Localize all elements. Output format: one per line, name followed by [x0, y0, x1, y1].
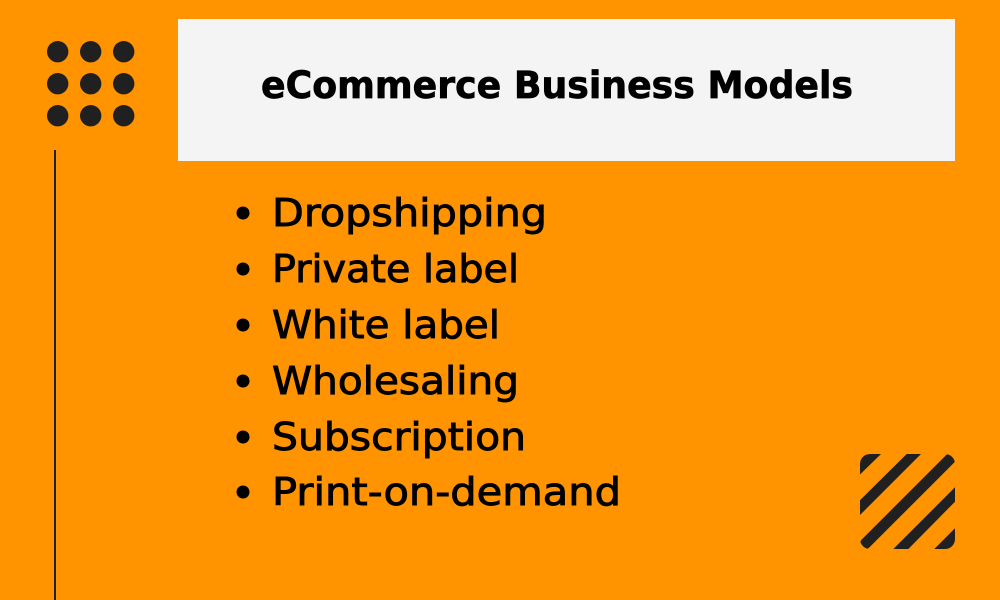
- item: Private label: Private label: [272, 247, 519, 292]
- item: Print-on-demand: Print-on-demand: [272, 470, 621, 515]
- item: White label: White label: [272, 303, 500, 348]
- item: Wholesaling: Wholesaling: [272, 359, 519, 404]
- bullet list: [236, 191, 621, 515]
- icon: striped square: [860, 454, 955, 549]
- title panel: [178, 19, 955, 161]
- item: Dropshipping: Dropshipping: [272, 191, 547, 236]
- vertical line: [54, 150, 56, 600]
- title: eCommerce Business Models: [261, 64, 853, 107]
- item: Subscription: Subscription: [272, 415, 526, 460]
- icon: dot grid: [47, 41, 134, 126]
